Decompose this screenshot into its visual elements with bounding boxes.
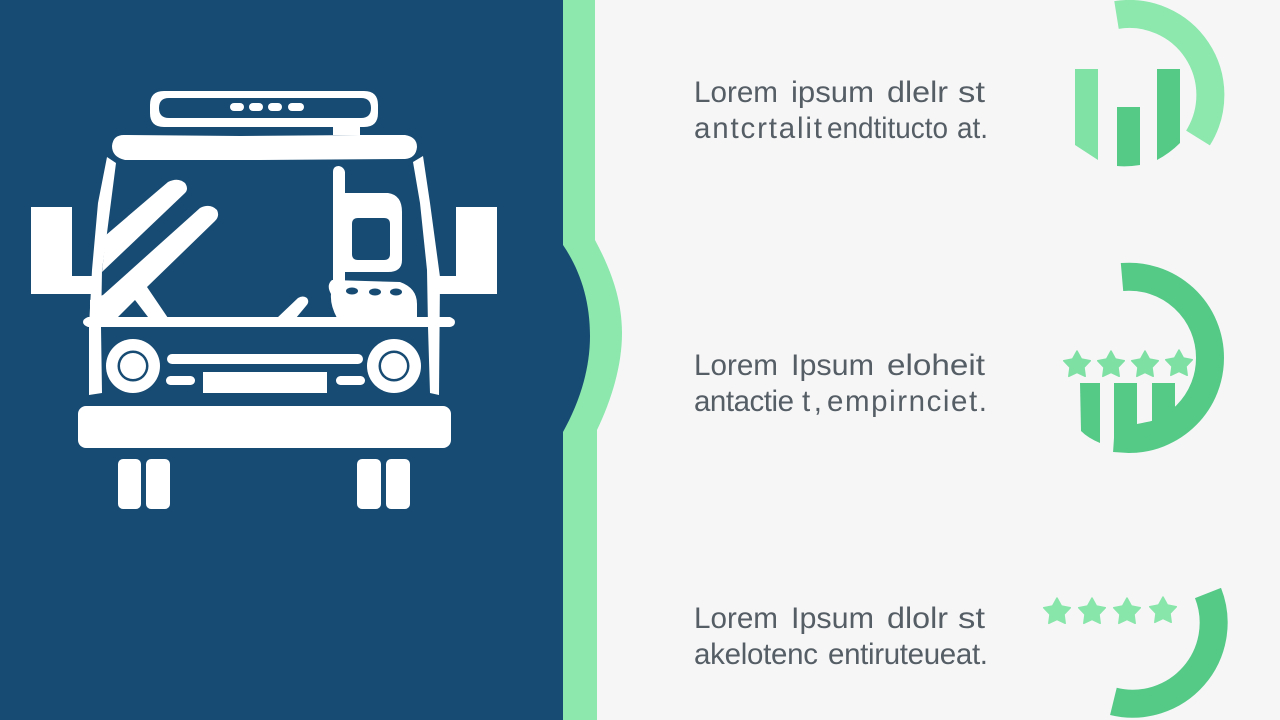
left wheels [118, 459, 170, 509]
text block 3: st [958, 602, 985, 635]
text block 3: dlolr [887, 602, 948, 635]
icon: stars with arc [1044, 593, 1214, 704]
gaps between stars [1087, 367, 1168, 383]
arc [1116, 14, 1210, 138]
roof rack [150, 91, 378, 135]
right bars [1114, 383, 1175, 452]
text block 3: akelotenc [694, 638, 818, 671]
phone shape [333, 166, 402, 284]
upper wiper [102, 180, 187, 272]
text block 2: t, [802, 385, 822, 418]
left pillar [89, 157, 116, 395]
right indicator [336, 376, 365, 385]
text block 3: Lorem [694, 602, 778, 635]
text block 3 [694, 602, 988, 671]
text block 3: Ipsum [791, 602, 874, 635]
right headlight [367, 339, 421, 393]
lower wiper [90, 206, 218, 318]
text block 2: empirnciet. [827, 385, 987, 418]
text block 2 [694, 349, 987, 418]
dashboard device [329, 280, 417, 318]
small wiper [277, 296, 308, 318]
bumper [78, 406, 451, 448]
text block 2: eloheit [887, 349, 985, 382]
text block 1: dlelr [887, 76, 948, 109]
arc [1113, 593, 1214, 704]
text block 1: at. [957, 112, 988, 145]
left headlight [106, 339, 160, 393]
stars [1044, 597, 1176, 623]
text block 3: entiruteueat. [828, 638, 988, 671]
roof bar [112, 135, 417, 160]
panel: navy left panel [0, 0, 590, 720]
rack lights [230, 103, 304, 111]
icon: rating chart with arc [1064, 277, 1210, 452]
right wheels [357, 459, 410, 509]
text block 2: Ipsum [791, 349, 874, 382]
text block 2: Lorem [694, 349, 778, 382]
right bar [1157, 69, 1180, 160]
text block 1: antcrtalit [694, 112, 822, 145]
left mirror [31, 207, 95, 294]
text block 1 [694, 76, 988, 145]
grille bar [167, 354, 363, 364]
arc [1114, 277, 1210, 439]
icon: bus front [31, 91, 497, 509]
middle bar [1117, 107, 1140, 166]
green curved band [560, 0, 622, 720]
right pillar [413, 156, 440, 395]
stars [1064, 350, 1192, 376]
text block 1: st [958, 76, 985, 109]
icon: bar chart with arc [1075, 14, 1210, 166]
wiper gap [118, 300, 148, 317]
left bar [1080, 383, 1100, 443]
text block 1: Lorem [694, 76, 778, 109]
dashboard bar [83, 317, 455, 327]
left indicator [166, 376, 195, 385]
license plate [203, 372, 327, 393]
left bar [1075, 69, 1098, 160]
right mirror [435, 207, 497, 294]
text block 1: ipsum [791, 76, 874, 109]
text block 2: antactie [694, 385, 794, 418]
text block 1: endtitucto [827, 112, 948, 145]
device buttons [346, 288, 402, 296]
